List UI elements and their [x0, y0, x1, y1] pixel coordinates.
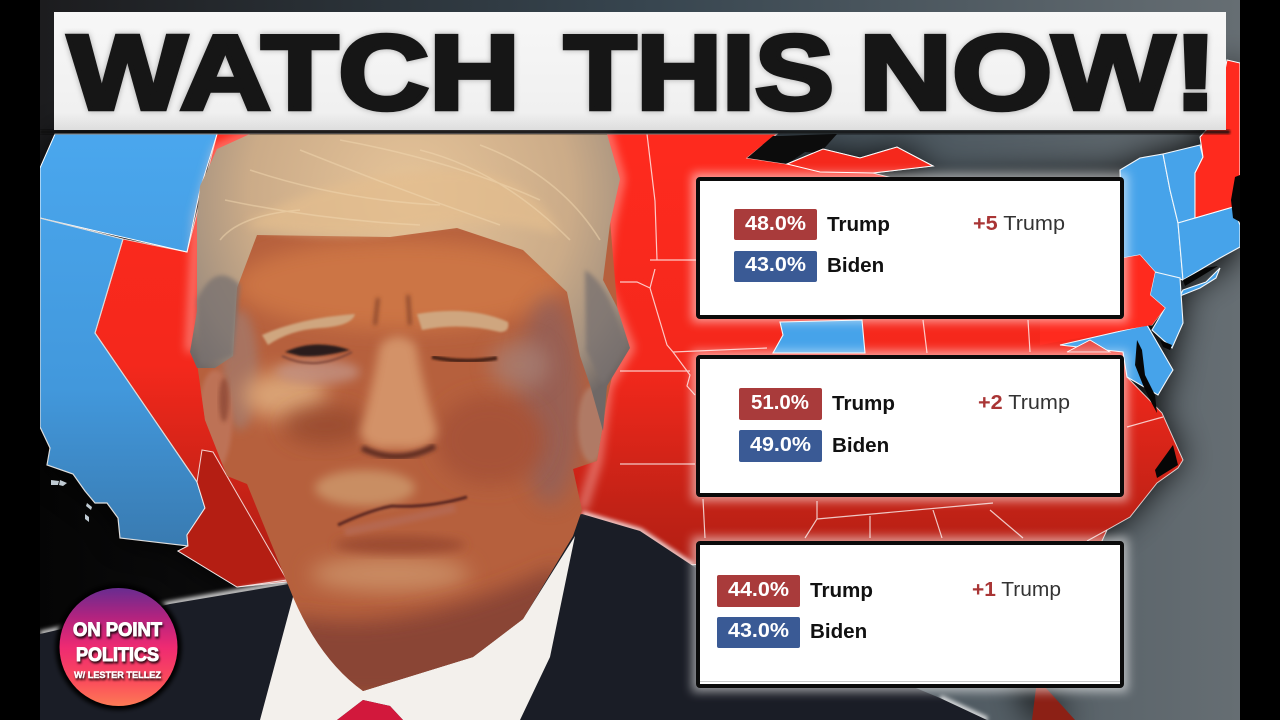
state: California — [40, 218, 205, 546]
upper lip area — [315, 470, 415, 506]
left cheek highlight — [243, 371, 327, 419]
nose — [360, 336, 437, 449]
Trump share badge: 51.0% — [751, 392, 809, 414]
Biden share badge: 43.0% — [745, 254, 806, 276]
right ear — [578, 387, 606, 463]
logo text — [73, 620, 162, 681]
state: Upper Michigan — [787, 147, 933, 173]
Maryland and Delaware — [1060, 325, 1173, 395]
frown lines — [375, 295, 410, 325]
banner shadow — [40, 130, 1230, 134]
Trump share badge — [739, 388, 822, 420]
logo text: W/ LESTER TELLEZ — [74, 670, 161, 681]
Trump share badge: 44.0% — [728, 579, 789, 601]
margin: +2 Trump — [978, 391, 1070, 414]
state borders — [620, 134, 1163, 541]
neck — [290, 565, 560, 700]
Biden label: Biden — [832, 434, 889, 457]
Biden share badge: 43.0% — [728, 620, 789, 642]
poll card 1 — [698, 179, 1122, 317]
Biden share badge — [739, 430, 822, 462]
title text: THIS — [564, 14, 834, 132]
left eye pouch — [276, 360, 360, 384]
small West Virginia — [1067, 340, 1110, 352]
silhouette glow — [190, 134, 630, 510]
Missouri strip — [773, 320, 865, 353]
states: blue northeast — [773, 145, 1240, 395]
face and neck — [198, 222, 618, 691]
title text: WATCH — [68, 14, 520, 132]
state: Pennsylvania — [1040, 255, 1165, 345]
Trump share badge: 48.0% — [745, 213, 806, 235]
state: New Hampshire and Maine — [1195, 60, 1240, 218]
Biden share badge — [734, 251, 817, 282]
man's portrait — [180, 134, 640, 710]
left cheek shadow — [283, 405, 367, 445]
suit — [40, 514, 987, 720]
water: northeast — [1135, 175, 1240, 478]
Biden label: Biden — [827, 254, 884, 277]
New Jersey — [1150, 272, 1183, 348]
poll card 2 — [698, 357, 1122, 495]
Trump share badge — [734, 209, 817, 240]
suit and shirt — [40, 514, 987, 720]
state: Arizona edge — [178, 450, 287, 587]
logo text: ON POINT — [73, 620, 162, 641]
hair strands — [220, 140, 600, 240]
Biden share badge: 49.0% — [750, 434, 811, 456]
state: Florida — [1032, 688, 1075, 720]
left ear — [198, 370, 232, 470]
state: Oregon and Washington — [40, 134, 217, 252]
eye left lower lid — [282, 352, 352, 363]
brow left — [262, 314, 355, 345]
Biden label: Biden — [810, 620, 867, 643]
Long Island — [1180, 268, 1220, 296]
title banner — [54, 12, 1226, 132]
lower lip shadow — [335, 536, 465, 554]
mouth — [338, 497, 467, 525]
poll card 3 — [698, 543, 1122, 686]
California islands — [51, 480, 92, 522]
forehead — [235, 240, 565, 330]
side hair grey — [197, 270, 625, 385]
Vermont — [1163, 145, 1203, 223]
eye right wink — [432, 357, 497, 361]
red states — [95, 134, 1183, 680]
right cheek — [435, 395, 545, 485]
left temple — [222, 310, 258, 430]
hair sheen — [245, 170, 560, 235]
margin: +5 Trump — [973, 212, 1065, 235]
New England south — [1178, 207, 1240, 280]
title text: NOW! — [859, 14, 1217, 132]
chin — [310, 556, 470, 592]
red tie — [337, 700, 403, 720]
Trump label: Trump — [810, 579, 873, 602]
Trump label: Trump — [832, 392, 895, 415]
Biden share badge — [717, 617, 800, 648]
channel logo — [56, 584, 182, 710]
hair — [190, 134, 630, 431]
lower lip — [345, 508, 455, 532]
title text — [68, 14, 1217, 132]
brow right — [417, 311, 508, 332]
crows feet — [490, 341, 550, 389]
margin: +1 Trump — [972, 578, 1061, 601]
right temple — [518, 295, 582, 505]
New York — [1120, 154, 1183, 280]
logo text: POLITICS — [76, 645, 159, 666]
Great Lakes — [747, 134, 837, 164]
eye left — [285, 344, 350, 356]
suit glow — [40, 514, 987, 720]
card footer rule — [700, 681, 1120, 682]
Trump share badge — [717, 575, 800, 607]
card glows — [692, 173, 1128, 692]
Trump label: Trump — [827, 213, 890, 236]
shirt collar — [260, 536, 575, 720]
nose shadow — [362, 446, 435, 457]
